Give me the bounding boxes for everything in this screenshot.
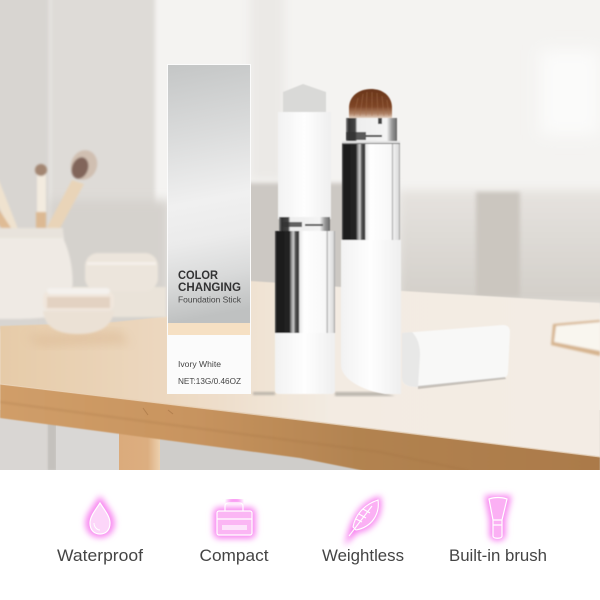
upper white tube — [278, 112, 331, 219]
label: Built-in brush: Built-in brush — [449, 546, 547, 565]
label: Compact: Compact — [200, 546, 269, 565]
foundation stick (left, sponge tip) — [275, 84, 335, 394]
chrome barrel — [342, 141, 400, 240]
table leg — [119, 430, 160, 472]
background makeup jar with brushes — [0, 146, 101, 319]
powder puck on tray — [72, 253, 166, 317]
chrome collar — [346, 118, 397, 141]
white tube base — [341, 240, 401, 394]
label: Weightless: Weightless — [322, 546, 404, 565]
box subtitle: Foundation Stick — [178, 294, 242, 304]
sponge tip — [283, 84, 326, 112]
photo background: wall and curtains — [0, 0, 600, 480]
icon: water drop — [89, 502, 111, 534]
notebook on table — [551, 320, 600, 356]
net weight: NET:13G/0.46OZ — [178, 376, 241, 386]
jar — [0, 231, 73, 319]
brush bristles — [349, 89, 392, 118]
chrome barrel — [275, 231, 335, 333]
peach shade band — [168, 323, 250, 335]
table top — [0, 281, 600, 472]
footer panel — [0, 470, 600, 600]
box title: COLOR — [178, 270, 219, 282]
label: Waterproof: Waterproof — [57, 546, 143, 565]
brush stick (right) — [341, 89, 401, 394]
product box — [167, 64, 251, 394]
shade name: Ivory White — [178, 359, 221, 369]
icon: compact bag — [217, 500, 252, 535]
removed cap lying on table — [402, 325, 510, 389]
box title second line: CHANGING — [178, 282, 241, 294]
icon: makeup brush — [489, 498, 507, 538]
white base — [275, 333, 335, 394]
brushes — [0, 146, 101, 232]
table front edge — [0, 384, 600, 472]
chrome neck — [279, 217, 330, 231]
small compact — [43, 288, 114, 334]
icon: feather — [349, 500, 378, 536]
